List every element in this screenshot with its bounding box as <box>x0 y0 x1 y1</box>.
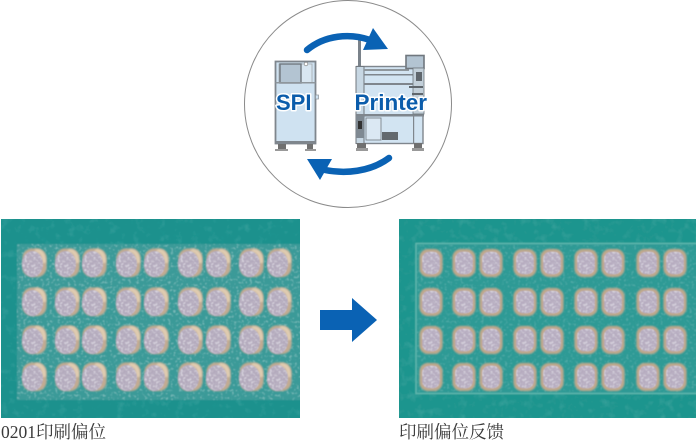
pad rows, offset <box>22 248 292 391</box>
circle outline <box>244 0 452 208</box>
caption: print offset feedback: 印刷偏位反馈 <box>399 422 504 442</box>
diagram: SPI and printer feedback loop <box>244 0 452 208</box>
label: Printer: Printer <box>354 90 427 115</box>
arrow: bottom, printer to SPI <box>307 158 389 180</box>
icon: printer machine <box>356 40 424 151</box>
photo: 0201 print offset <box>0 218 302 419</box>
caption: 0201 print offset: 0201印刷偏位 <box>1 422 106 442</box>
icon: SPI machine <box>275 62 318 151</box>
label: SPI: SPI <box>276 90 311 115</box>
pad rows, aligned <box>420 249 686 391</box>
photo: print offset feedback <box>398 218 696 419</box>
arrow: top, SPI to printer <box>307 28 388 50</box>
arrow: before to after <box>320 298 377 342</box>
